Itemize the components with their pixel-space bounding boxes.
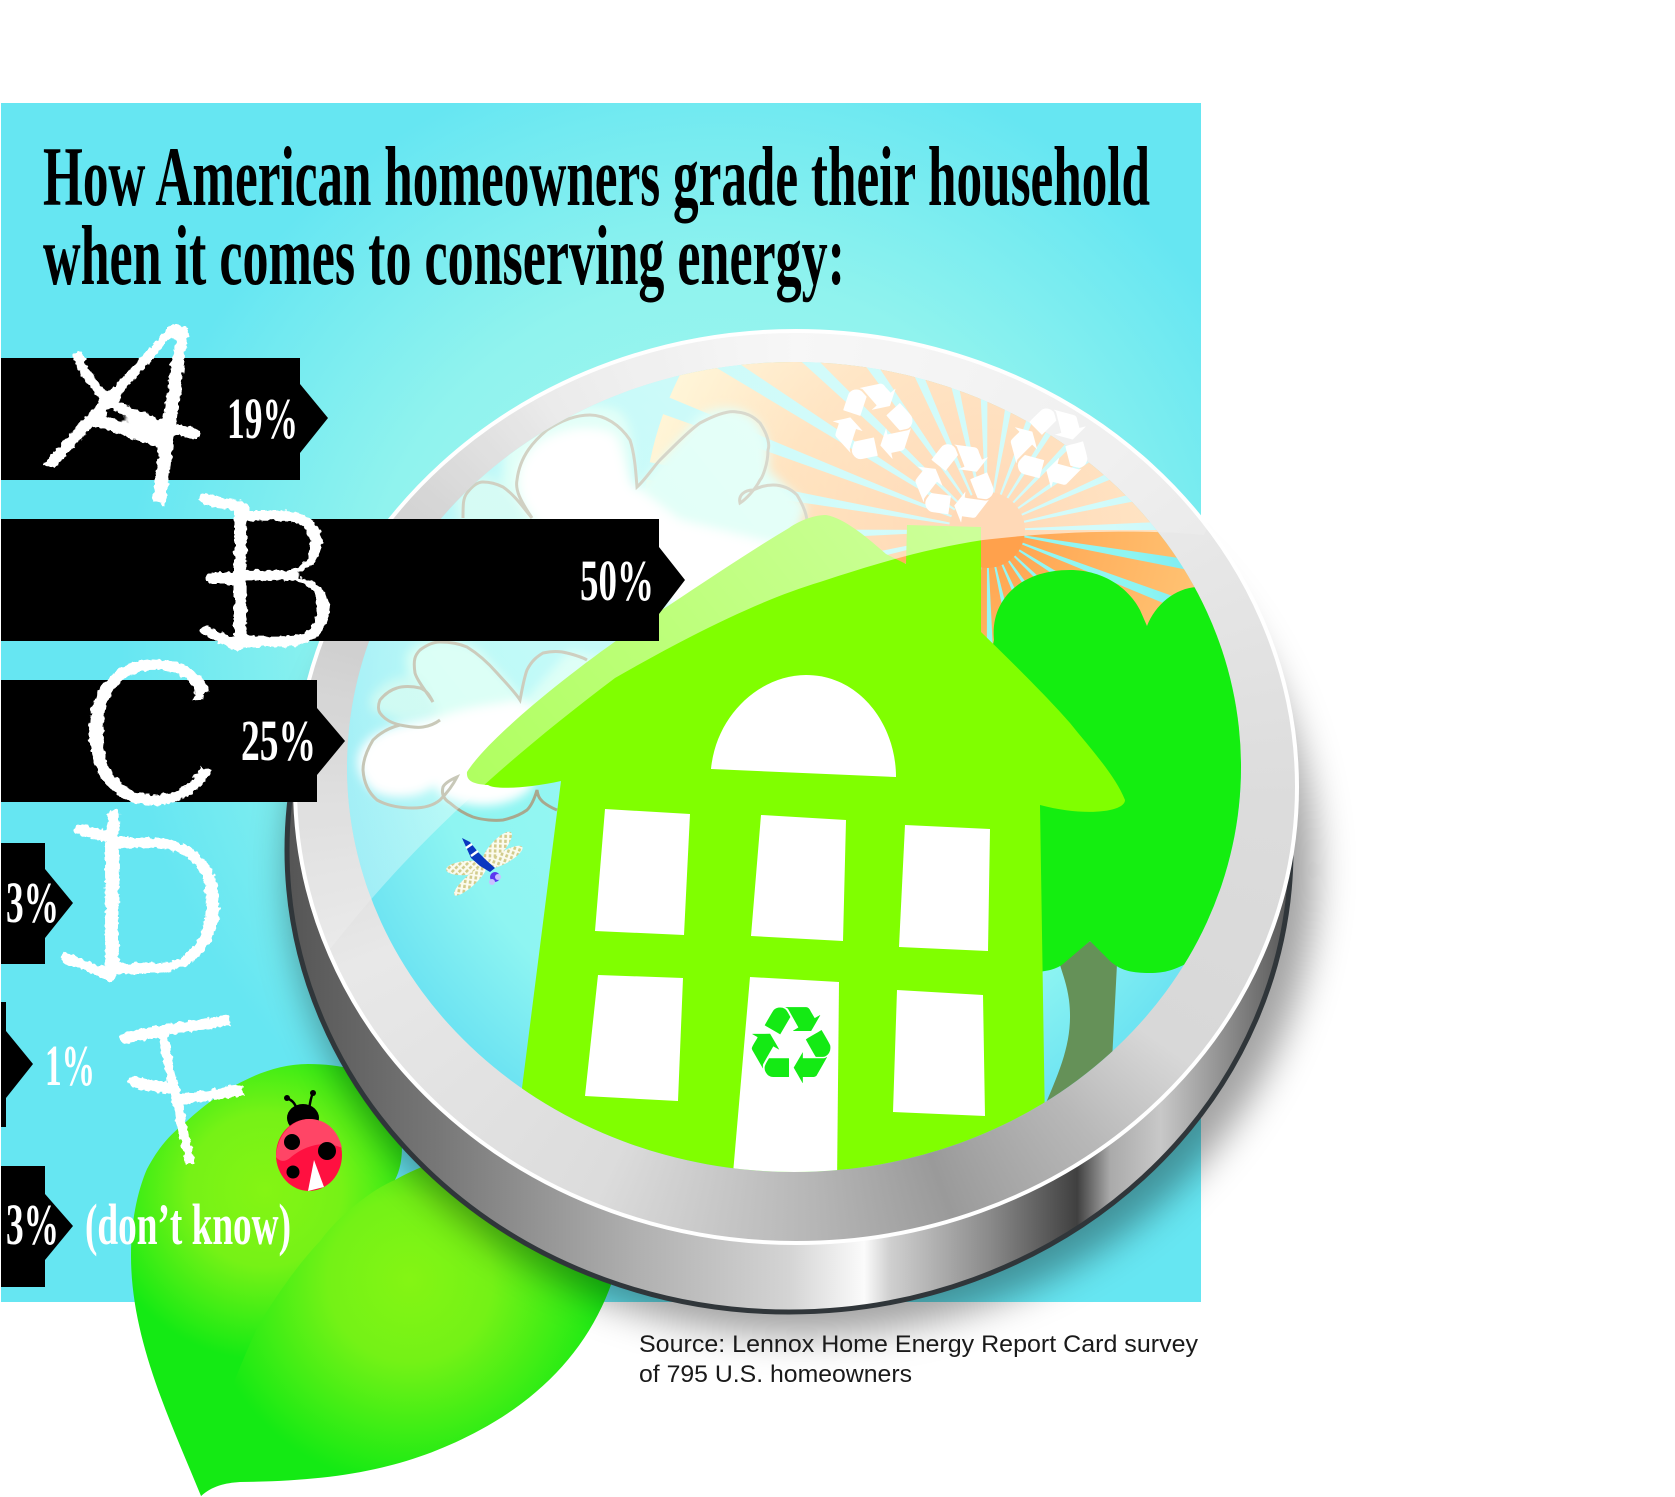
tree crown bbox=[993, 570, 1241, 973]
door bbox=[732, 977, 839, 1185]
grade letter F: F bbox=[129, 966, 279, 1215]
lower windows bbox=[585, 975, 985, 1116]
source note bbox=[639, 1331, 1199, 1388]
grade letter A: A bbox=[12, 249, 272, 561]
icon: white recycle symbols: ♻ bbox=[898, 416, 1011, 553]
house bbox=[467, 515, 1125, 1190]
bar: D 3% bbox=[1, 843, 73, 964]
bar: don't know 3% bbox=[1, 1166, 73, 1287]
grade letter D: D bbox=[86, 792, 232, 1020]
bar: A 19% bbox=[1, 358, 328, 480]
percent labels: 19% bbox=[227, 386, 298, 451]
dragonfly bbox=[446, 832, 523, 896]
title bbox=[43, 130, 1150, 303]
panel: sky background bbox=[1, 103, 1201, 1302]
percent labels: 50% bbox=[580, 548, 654, 613]
source note: of 795 U.S. homeowners bbox=[639, 1361, 912, 1388]
percent labels: 1% bbox=[45, 1033, 95, 1098]
lower cloud bbox=[358, 640, 610, 820]
illustration: disc white rim bbox=[295, 331, 1297, 1243]
upper cloud bbox=[455, 405, 807, 620]
ladybug bbox=[276, 1090, 342, 1191]
source note: Source: Lennox Home Energy Report Card survey bbox=[639, 1331, 1199, 1358]
illustration: round scene bbox=[340, 355, 1260, 1190]
percent labels bbox=[6, 386, 654, 1257]
illustration: disc drop shadow bbox=[288, 404, 1316, 1336]
percent labels: 25% bbox=[241, 708, 316, 773]
percent labels: (don’t know) bbox=[85, 1192, 291, 1257]
illustration: back leaf bbox=[131, 1064, 420, 1496]
grade letter B: B bbox=[216, 464, 342, 693]
bar: F 1% bbox=[1, 1002, 33, 1127]
bar: C 25% bbox=[1, 680, 345, 802]
illustration: disc top ring bbox=[294, 330, 1298, 1244]
sky bbox=[340, 355, 1250, 1180]
sun rays bbox=[815, 358, 1159, 702]
illustration: front leaf bbox=[201, 1166, 640, 1496]
bar: B 50% bbox=[1, 519, 685, 641]
illustration: ring gloss bbox=[324, 641, 369, 656]
arched window bbox=[711, 675, 896, 777]
percent labels: 3% bbox=[6, 870, 59, 935]
icon: white recycle symbols: ♻ bbox=[813, 354, 934, 497]
grade letter C: C bbox=[76, 614, 223, 852]
percent labels: 3% bbox=[6, 1192, 59, 1257]
illustration: disc side wall bbox=[287, 388, 1291, 1312]
icon: green recycle symbol on door: ♻ bbox=[743, 984, 839, 1109]
icon: white recycle symbols bbox=[813, 354, 1112, 553]
icon: white recycle symbols: ♻ bbox=[986, 377, 1112, 522]
upper windows bbox=[595, 809, 990, 951]
illustration: glass gloss over scene bbox=[347, 362, 1158, 899]
tree trunk bbox=[1043, 941, 1117, 1110]
title: when it comes to conserving energy: bbox=[43, 209, 845, 303]
